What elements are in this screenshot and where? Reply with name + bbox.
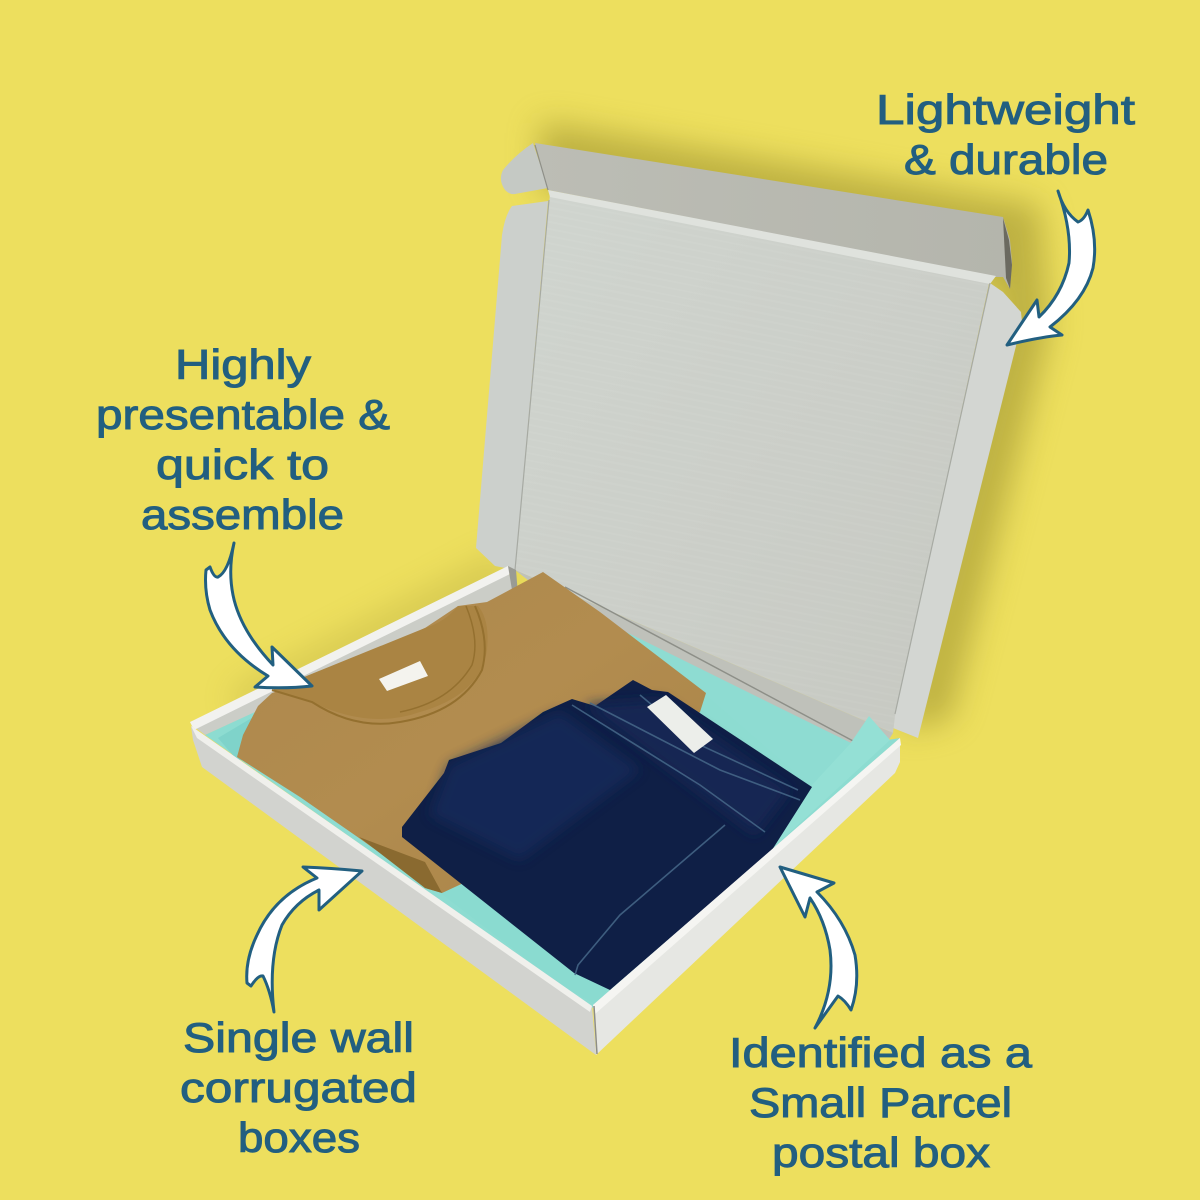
tissue paper [218, 631, 890, 1005]
jeans body [402, 680, 812, 990]
box base: left front wall [191, 726, 596, 1055]
base shadow [230, 550, 520, 720]
lid: top flap [535, 143, 1012, 289]
text: highly presentable: quick to [156, 441, 329, 488]
text: small parcel: Small Parcel [749, 1079, 1012, 1126]
box base: white rim [190, 566, 512, 730]
text: single wall: Single wall [183, 1014, 414, 1061]
text: single wall: corrugated [180, 1064, 417, 1111]
text: lightweight & durable: Lightweight [876, 86, 1135, 133]
box base: back wall [515, 570, 893, 745]
arrow: to box corner [206, 543, 312, 688]
jeans label [647, 695, 713, 753]
text: lightweight & durable [876, 86, 1135, 183]
text: highly presentable [96, 341, 390, 538]
lid shadow [540, 122, 1050, 730]
box base: left back wall [192, 572, 518, 735]
box base: right front wall [593, 738, 900, 1055]
arrow: to left wall [247, 867, 362, 1012]
lid: main panel [515, 194, 990, 733]
jeans denim highlight [430, 712, 640, 860]
shirt hem folds [359, 837, 442, 893]
box base: floor [205, 592, 900, 1008]
text: small parcel: postal box [772, 1129, 990, 1176]
open box [190, 143, 1022, 1055]
arrow: to lid flap [1007, 191, 1095, 345]
text: small parcel [729, 1029, 1033, 1176]
jeans [402, 680, 812, 990]
lid: right flap [893, 283, 1022, 738]
text: small parcel: Identified as a [729, 1029, 1033, 1076]
text: lightweight & durable: & durable [904, 136, 1108, 183]
lid: crease highlight [548, 190, 996, 284]
text: highly presentable: presentable & [96, 391, 390, 438]
text: highly presentable: assemble [141, 491, 344, 538]
shirt neck inside [272, 606, 488, 719]
t-shirt [237, 572, 706, 893]
shirt label [379, 661, 428, 691]
shirt collar [272, 606, 485, 724]
lid: fold lines [515, 200, 990, 714]
lid: dark cut edge [1003, 218, 1012, 289]
text: single wall: boxes [238, 1114, 360, 1161]
lid: left flap [476, 201, 548, 570]
shirt body [237, 572, 706, 893]
text: highly presentable: Highly [175, 341, 311, 388]
arrow: to right wall [780, 867, 857, 1028]
jeans stitching [572, 695, 800, 975]
lid: top flap ear [501, 143, 548, 194]
text: single wall [180, 1014, 417, 1161]
